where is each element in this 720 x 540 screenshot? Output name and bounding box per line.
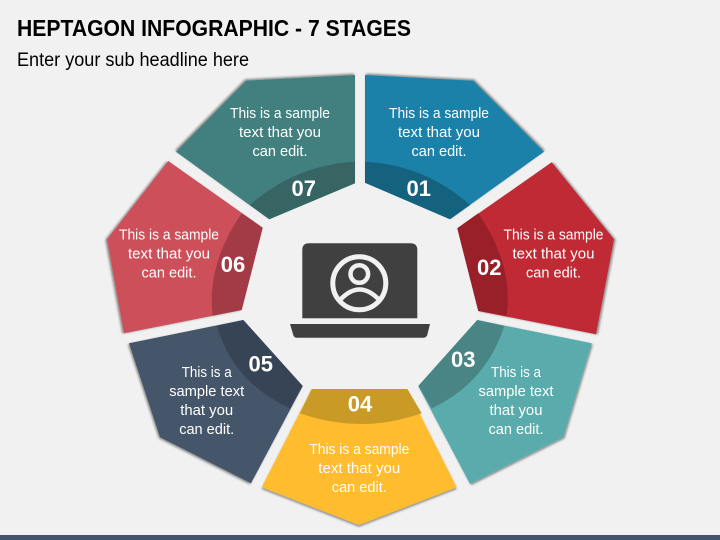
panel: stage 02 (457, 162, 614, 334)
stage 07 shape (176, 75, 355, 219)
stage 01 number: 01 (406, 176, 431, 201)
stage 04 number: 04 (348, 392, 373, 416)
stage 03 text: sample text (478, 383, 554, 400)
stage 02 shape (457, 162, 614, 334)
stage 02 text: This is a sample (504, 226, 604, 244)
stage 02 number: 02 (477, 255, 502, 280)
stage 07 number: 07 (291, 176, 316, 201)
stage 05 text: can edit. (179, 421, 234, 438)
stage 01 text: can edit. (412, 143, 466, 160)
stage 01 dark arc (365, 162, 470, 219)
stage 05 text: that you (180, 402, 233, 419)
stage 02 text: text that you (512, 246, 594, 262)
stage 05 text: sample text (169, 383, 245, 400)
icon: laptop with user (290, 243, 430, 338)
stage 05 shape (129, 320, 303, 483)
stage 07 text: This is a sample (230, 105, 330, 122)
stage 01 text: This is a sample (389, 105, 489, 122)
panel: stage 04 (262, 389, 457, 525)
subtitle: Enter your sub headline here (17, 50, 249, 71)
stage 03 dark arc (418, 320, 504, 408)
laptop base (290, 324, 430, 338)
stage 03 text: This is a (491, 364, 542, 381)
stage 01 shape (365, 75, 544, 219)
title: HEPTAGON INFOGRAPHIC - 7 STAGES (17, 15, 411, 41)
stage 06 text: text that you (128, 246, 210, 262)
footer bar (0, 535, 720, 540)
stage 07 text: text that you (239, 124, 321, 141)
stage 03 text: that you (490, 402, 542, 419)
panel: stage 05 (129, 320, 303, 483)
stage 05 text: This is a (182, 364, 232, 381)
stage 02 dark arc (457, 213, 508, 316)
stage 06 number: 06 (221, 252, 245, 277)
stage 04 text: This is a sample (309, 441, 409, 458)
stage 06 dark arc (212, 213, 263, 316)
stage 04 dark arc (300, 389, 422, 424)
panel: stage 03 (418, 320, 592, 484)
stage 06 shape (107, 161, 263, 333)
panel: stage 01 (365, 75, 544, 219)
user circle (333, 257, 386, 310)
stage 03 text: can edit. (488, 421, 544, 438)
stage 04 text: can edit. (332, 479, 387, 496)
panel: stage 06 (107, 161, 263, 333)
laptop screen (302, 243, 417, 318)
stage 04 text: text that you (318, 460, 400, 477)
stage 07 dark arc (250, 162, 355, 219)
user shoulders (340, 290, 379, 300)
stage 07 text: can edit. (252, 143, 308, 160)
stage 05 number: 05 (248, 352, 273, 377)
stage 03 shape (418, 320, 592, 484)
stage 06 text: This is a sample (119, 226, 219, 244)
stage 06 text: can edit. (142, 264, 196, 282)
stage 01 text: text that you (398, 124, 480, 141)
stage 02 text: can edit. (526, 264, 581, 282)
stage 04 shape (262, 389, 457, 525)
stage 03 number: 03 (451, 347, 476, 372)
panel: stage 07 (176, 75, 355, 219)
user head (350, 265, 368, 283)
stage 05 dark arc (217, 320, 303, 408)
